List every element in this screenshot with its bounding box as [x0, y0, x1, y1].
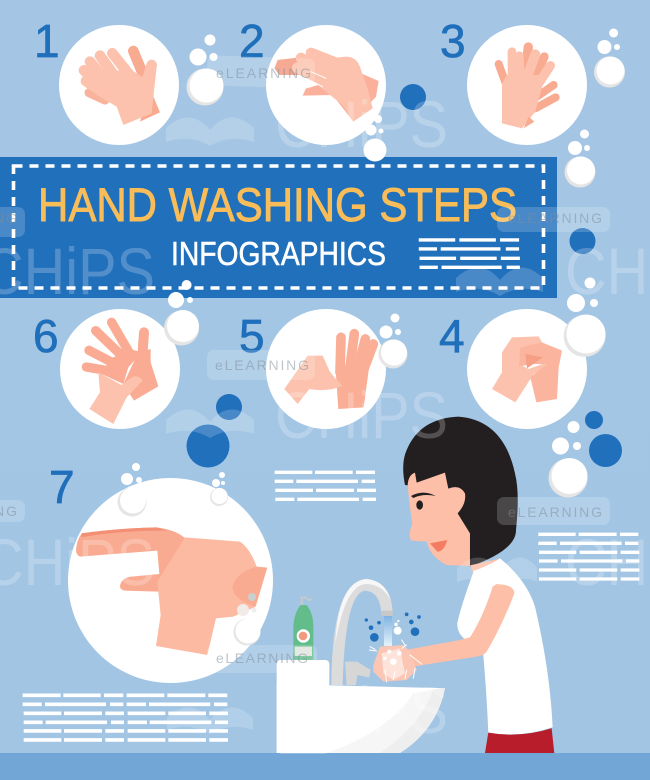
- watermark wordmark: CHiPS: [275, 87, 448, 161]
- text block beside step 7: [275, 472, 376, 499]
- bubble cluster step 3: [594, 28, 625, 88]
- title: HAND WASHING STEPS: [38, 178, 517, 231]
- woman arm: [402, 584, 514, 667]
- soapy hands: [369, 640, 422, 682]
- woman neck: [470, 559, 500, 577]
- hand illustration 2: [274, 53, 379, 122]
- number 7: 7: [49, 461, 75, 513]
- watermark label: eLEARNING: [215, 357, 309, 373]
- step circle 2: [266, 25, 386, 145]
- hand illustration 7: [76, 527, 267, 655]
- watermark book: [457, 557, 537, 586]
- watermark wordmark: CHiPS: [275, 378, 448, 452]
- step numbers second row: [33, 310, 465, 513]
- number 2: 2: [239, 15, 265, 67]
- watermark left: [0, 207, 155, 308]
- bubble cluster step 5: [378, 314, 408, 368]
- watermark label: eLEARNING: [508, 210, 602, 226]
- watermark book: [167, 707, 253, 734]
- faucet: [331, 579, 393, 685]
- soap bubbles white: [118, 28, 625, 646]
- soap bubbles blue: [186, 84, 622, 468]
- hand illustration 4: [492, 336, 562, 402]
- bubble cluster step 6: [164, 280, 199, 346]
- soap bottle: [293, 597, 313, 661]
- bubble cluster step 2: [364, 115, 386, 162]
- woman mouth: [430, 540, 447, 552]
- woman face: [408, 473, 470, 566]
- step circle 3: [467, 25, 587, 145]
- step circle 4: [467, 309, 587, 429]
- woman skirt: [485, 728, 554, 753]
- watermark pill: [207, 55, 315, 89]
- step circle 7: [68, 478, 273, 683]
- watermark book: [166, 409, 254, 438]
- water stream: [384, 616, 392, 646]
- dashed border: [14, 166, 544, 288]
- title banner: [0, 157, 557, 298]
- watermark label: eLEARNING: [216, 65, 311, 81]
- watermark pill: [207, 645, 317, 673]
- watermark top: [166, 55, 448, 161]
- bubble cluster step 7 hand: [234, 593, 260, 646]
- watermark label: eLEARNING: [216, 650, 308, 666]
- floor bar: [0, 753, 650, 780]
- hand illustration 3: [499, 47, 556, 128]
- woman hair back: [403, 417, 518, 567]
- hand illustration 5: [284, 334, 373, 409]
- sink: [277, 660, 445, 753]
- number 6: 6: [33, 310, 59, 362]
- watermark pill: [207, 350, 315, 380]
- woman washing hands at sink: [277, 417, 554, 753]
- watermark pill: [0, 500, 25, 522]
- number 1: 1: [34, 15, 60, 67]
- subtitle: INFOGRAPHICS: [171, 235, 386, 272]
- bubble cluster step 7 left: [118, 463, 146, 516]
- number 4: 4: [439, 310, 465, 362]
- watermark center: [166, 350, 448, 452]
- number 3: 3: [440, 15, 466, 67]
- bubble cluster step 1: [186, 34, 224, 106]
- number 5: 5: [239, 310, 265, 362]
- text block right of woman: [538, 534, 639, 579]
- bubble cluster step 4: [564, 278, 606, 357]
- watermark book: [166, 117, 254, 146]
- banner text placeholder lines: [419, 240, 520, 267]
- watermark pill: [497, 497, 610, 525]
- watermark bottom: [167, 645, 448, 747]
- watermark lower left: [0, 500, 155, 599]
- bubble cluster step 7 right: [210, 472, 228, 506]
- watermark right: [456, 207, 650, 308]
- step circle 5: [266, 309, 386, 429]
- watermark label: eLEARNING: [508, 504, 602, 520]
- watermark pill: [0, 207, 25, 237]
- watermark lower right: [457, 497, 650, 599]
- soapy hands and water droplets: [365, 612, 422, 682]
- woman shirt: [457, 558, 553, 735]
- hand illustration 1: [84, 51, 160, 125]
- step numbers top row: [34, 15, 466, 67]
- step circle 6: [60, 309, 180, 429]
- text block bottom left: [23, 695, 228, 740]
- bubble cluster right of banner: [564, 130, 596, 188]
- hand illustration 6: [86, 322, 158, 424]
- woman eyebrow and eye: [411, 493, 436, 510]
- watermark pill: [497, 207, 610, 232]
- step circle 1: [59, 25, 179, 145]
- bubble cluster right of woman: [548, 421, 588, 498]
- watermark book: [456, 267, 543, 296]
- water droplets: [365, 612, 421, 642]
- watermark wordmark: CHiPS: [275, 673, 448, 747]
